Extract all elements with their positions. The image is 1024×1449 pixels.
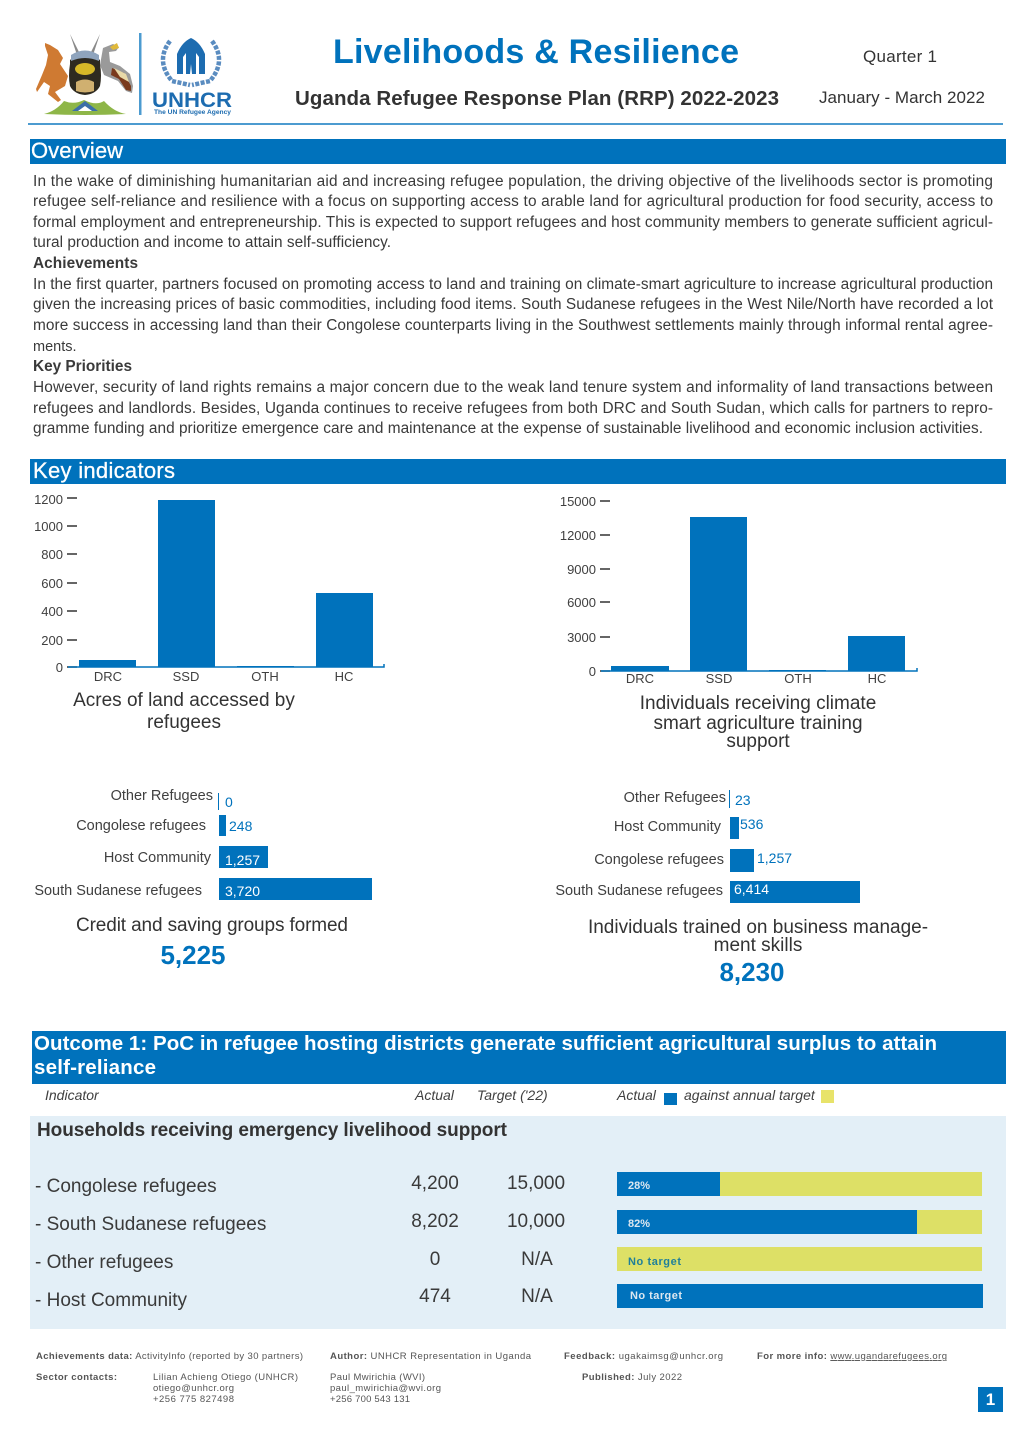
table header (45, 1087, 834, 1105)
bar chart: acres of land accessed: HC (335, 669, 353, 684)
chart caption: Credit and saving groups formed (76, 915, 348, 936)
row: host community: 474 (419, 1286, 451, 1307)
text block: overview body: formal employment and entrepreneurship. This is expected to support refugees and host community members to generate sufficient agricul- (33, 214, 993, 231)
quarter label: Quarter 1 (863, 47, 937, 66)
bar chart: acres of land accessed: 600 (41, 576, 63, 591)
bar chart: business management skills: 1,257 (757, 850, 792, 866)
more info: For more info: www.ugandarefugees.org (757, 1351, 947, 1362)
bar chart: climate smart agriculture training: 3000 (567, 630, 596, 645)
bar chart: climate smart agriculture training (560, 494, 917, 752)
row: south sudanese refugees: - South Sudanese refugees (35, 1214, 266, 1235)
icon: UNHCR logo (152, 38, 232, 116)
bar chart: credit and saving groups: Host Community (104, 850, 212, 866)
table section heading: Households receiving emergency livelihood support (37, 1120, 508, 1141)
contact: WVI (330, 1372, 441, 1405)
chart caption: Individuals receiving climate (640, 693, 876, 714)
row: congolese refugees: 15,000 (507, 1173, 565, 1194)
bar chart: climate smart agriculture training: 9000 (567, 562, 596, 577)
bar chart: climate smart agriculture training: 6000 (567, 595, 596, 610)
icon: UNHCR logo: UNHCR (152, 89, 232, 112)
bar chart: climate smart agriculture training: SSD (706, 671, 732, 686)
text block: overview body: In the first quarter, partners focused on promoting access to land and training on climate-smart agriculture to increase agricultural production (33, 276, 993, 293)
title: Livelihoods & Resilience (333, 33, 739, 71)
panel: outcome table (30, 1116, 1006, 1329)
table header: Indicator (45, 1087, 100, 1103)
bar chart: credit and saving groups: South Sudanese refugees (34, 883, 202, 899)
author: Author: UNHCR Representation in Uganda (330, 1351, 532, 1362)
row: congolese refugees (35, 1172, 982, 1197)
row: host community: No target (630, 1290, 682, 1302)
bar chart: business management skills: Host Community (614, 819, 722, 835)
bar chart: business management skills: Congolese refugees (594, 852, 724, 868)
text block: overview body: more success in accessing land than their Congolese counterparts living in the Southwest settlements mainly through informal rental agree- (33, 317, 993, 334)
text block: overview body: given the increasing prices of basic commodities, including food items. South Sudanese refugees in the West Nile/North have recorded a lot (33, 296, 994, 313)
text block: overview body: refugee self-reliance and resilience with a focus on supporting access to arable land for agricultural production for food security, access to (33, 193, 993, 210)
text block: overview body (33, 173, 994, 437)
text block: overview body: However, security of land rights remains a major concern due to the weak land tenure system and informality of land transactions between (33, 379, 993, 396)
chart caption (588, 917, 928, 956)
row: other refugees: - Other refugees (35, 1252, 173, 1273)
feedback: Feedback: ugakaimsg@unhcr.org (564, 1351, 723, 1362)
bar chart: credit and saving groups: 3,720 (225, 883, 260, 899)
sector contacts label: Sector contacts: (36, 1372, 117, 1383)
total value: 8,230 (719, 957, 785, 987)
row: host community: - Host Community (35, 1290, 188, 1311)
bar chart: acres of land accessed: 0 (56, 660, 63, 675)
bar chart: climate smart agriculture training: 0 (589, 664, 596, 679)
contact: WVI: +256 700 543 131 (330, 1394, 410, 1405)
row: host community: N/A (521, 1286, 553, 1307)
bar chart: business management skills: 6,414 (734, 881, 769, 897)
bar chart: climate smart agriculture training: 15000 (560, 494, 596, 509)
header rule (28, 123, 1003, 125)
total value: 5,225 (160, 940, 226, 970)
chart caption: Acres of land accessed by (73, 690, 295, 711)
text block: overview body: Achievements (33, 255, 138, 272)
bar chart: credit and saving groups: 1,257 (225, 852, 260, 868)
panel: overview (30, 138, 1006, 437)
bar chart: credit and saving groups: Other Refugees (111, 788, 213, 804)
subtitle: Uganda Refugee Response Plan (RRP) 2022-2023 (295, 87, 779, 110)
bar chart: credit and saving groups: 0 (225, 794, 233, 810)
heading: overview: Overview (31, 138, 123, 163)
footer (36, 1351, 1003, 1412)
bar chart: acres of land accessed: 1000 (34, 519, 63, 534)
chart caption: support (726, 731, 790, 752)
published date: Published: July 2022 (582, 1372, 682, 1383)
row: south sudanese refugees (35, 1210, 982, 1235)
bar chart: acres of land accessed: 1200 (34, 492, 63, 507)
header (28, 33, 1003, 125)
chart caption (640, 693, 876, 752)
bar chart: acres of land accessed: SSD (173, 669, 199, 684)
heading: key indicators (30, 458, 1006, 484)
bar chart: acres of land accessed: 200 (41, 633, 63, 648)
period label: January - March 2022 (819, 88, 985, 107)
contact: UNHCR: +256 775 827498 (153, 1394, 234, 1405)
bar chart: acres of land accessed: OTH (251, 669, 279, 684)
row: other refugees (35, 1247, 982, 1273)
bar chart: climate smart agriculture training: DRC (626, 671, 654, 686)
bar chart: climate smart agriculture training: HC (868, 671, 886, 686)
text block: overview body: In the wake of diminishing humanitarian aid and increasing refugee population, the driving objective of the livelihoods sector is promoting (33, 173, 993, 190)
heading: outcome 1: self-reliance (34, 1056, 156, 1079)
bar chart: acres of land accessed: DRC (94, 669, 122, 684)
row: south sudanese refugees: 8,202 (411, 1211, 459, 1232)
table header: Actual (616, 1087, 657, 1103)
row: congolese refugees: 28% (628, 1180, 650, 1192)
text block: overview body: ments. (33, 339, 77, 355)
bar chart: credit and saving groups (34, 788, 372, 970)
page number: 1 (986, 1390, 995, 1409)
text block: overview body: Key Priorities (33, 358, 132, 375)
contact: UNHCR (153, 1372, 298, 1405)
bar chart: credit and saving groups: Congolese refugees (76, 818, 206, 834)
bar chart: business management skills: South Sudanese refugees (555, 883, 723, 899)
row: south sudanese refugees: 82% (628, 1218, 650, 1230)
row: other refugees: No target (628, 1256, 681, 1268)
page number (978, 1387, 1003, 1412)
chart caption: smart agriculture training (653, 713, 863, 734)
chart caption (73, 690, 295, 733)
chart caption: refugees (147, 712, 221, 733)
heading: overview (30, 138, 1006, 164)
bar chart: business management skills: 23 (735, 792, 751, 808)
heading: outcome 1 (32, 1031, 1006, 1084)
bar chart: climate smart agriculture training: OTH (784, 671, 812, 686)
row: south sudanese refugees: 10,000 (507, 1211, 565, 1232)
contact: UNHCR: otiego@unhcr.org (153, 1383, 234, 1394)
heading: key indicators: Key indicators (33, 458, 175, 483)
icon: UNHCR logo: The UN Refugee Agency (154, 110, 232, 116)
text block: overview body: tural production and income to attain self-sufficiency. (33, 234, 391, 251)
bar chart: climate smart agriculture training: 12000 (560, 528, 596, 543)
bar chart: acres of land accessed: 800 (41, 547, 63, 562)
table header: Target ('22) (477, 1087, 548, 1103)
bar chart: acres of land accessed (34, 492, 384, 733)
bar chart: business management skills: Other Refugees (624, 790, 726, 806)
data source: Achievements data: ActivityInfo (reported by 30 partners) (36, 1351, 303, 1362)
row: congolese refugees: 4,200 (411, 1173, 459, 1194)
row: congolese refugees: - Congolese refugees (35, 1176, 217, 1197)
table header: Actual (414, 1087, 455, 1103)
bar chart: acres of land accessed: 400 (41, 604, 63, 619)
bar chart: credit and saving groups: 248 (229, 818, 253, 834)
contact: WVI: paul_mwirichia@wvi.org (330, 1383, 441, 1394)
bar chart: business management skills (555, 790, 928, 987)
chart caption: ment skills (714, 935, 802, 956)
divider between logos (139, 33, 142, 115)
row: host community (35, 1284, 983, 1311)
heading: outcome 1: Outcome 1: PoC in refugee hosting districts generate sufficient agricultural surplus to attain (34, 1032, 937, 1055)
contact: WVI: Paul Mwirichia (WVI) (330, 1372, 425, 1383)
row: other refugees: N/A (521, 1249, 553, 1270)
contact: UNHCR: Lilian Achieng Otiego (UNHCR) (153, 1372, 298, 1383)
row: other refugees: 0 (430, 1249, 440, 1270)
bar chart: business management skills: 536 (740, 816, 764, 832)
chart caption: Individuals trained on business manage- (588, 917, 928, 938)
table header: against annual target (684, 1087, 816, 1103)
text block: overview body: refugees and landlords. Besides, Uganda continues to receive refugees from both DRC and South Sudan, which calls for partners to repro- (33, 400, 993, 417)
text block: overview body: gramme funding and prioritize emergence care and maintenance at the expense of sustainable livelihood and economic inclusion activities. (33, 420, 983, 437)
icon: Uganda coat of arms (36, 34, 133, 115)
